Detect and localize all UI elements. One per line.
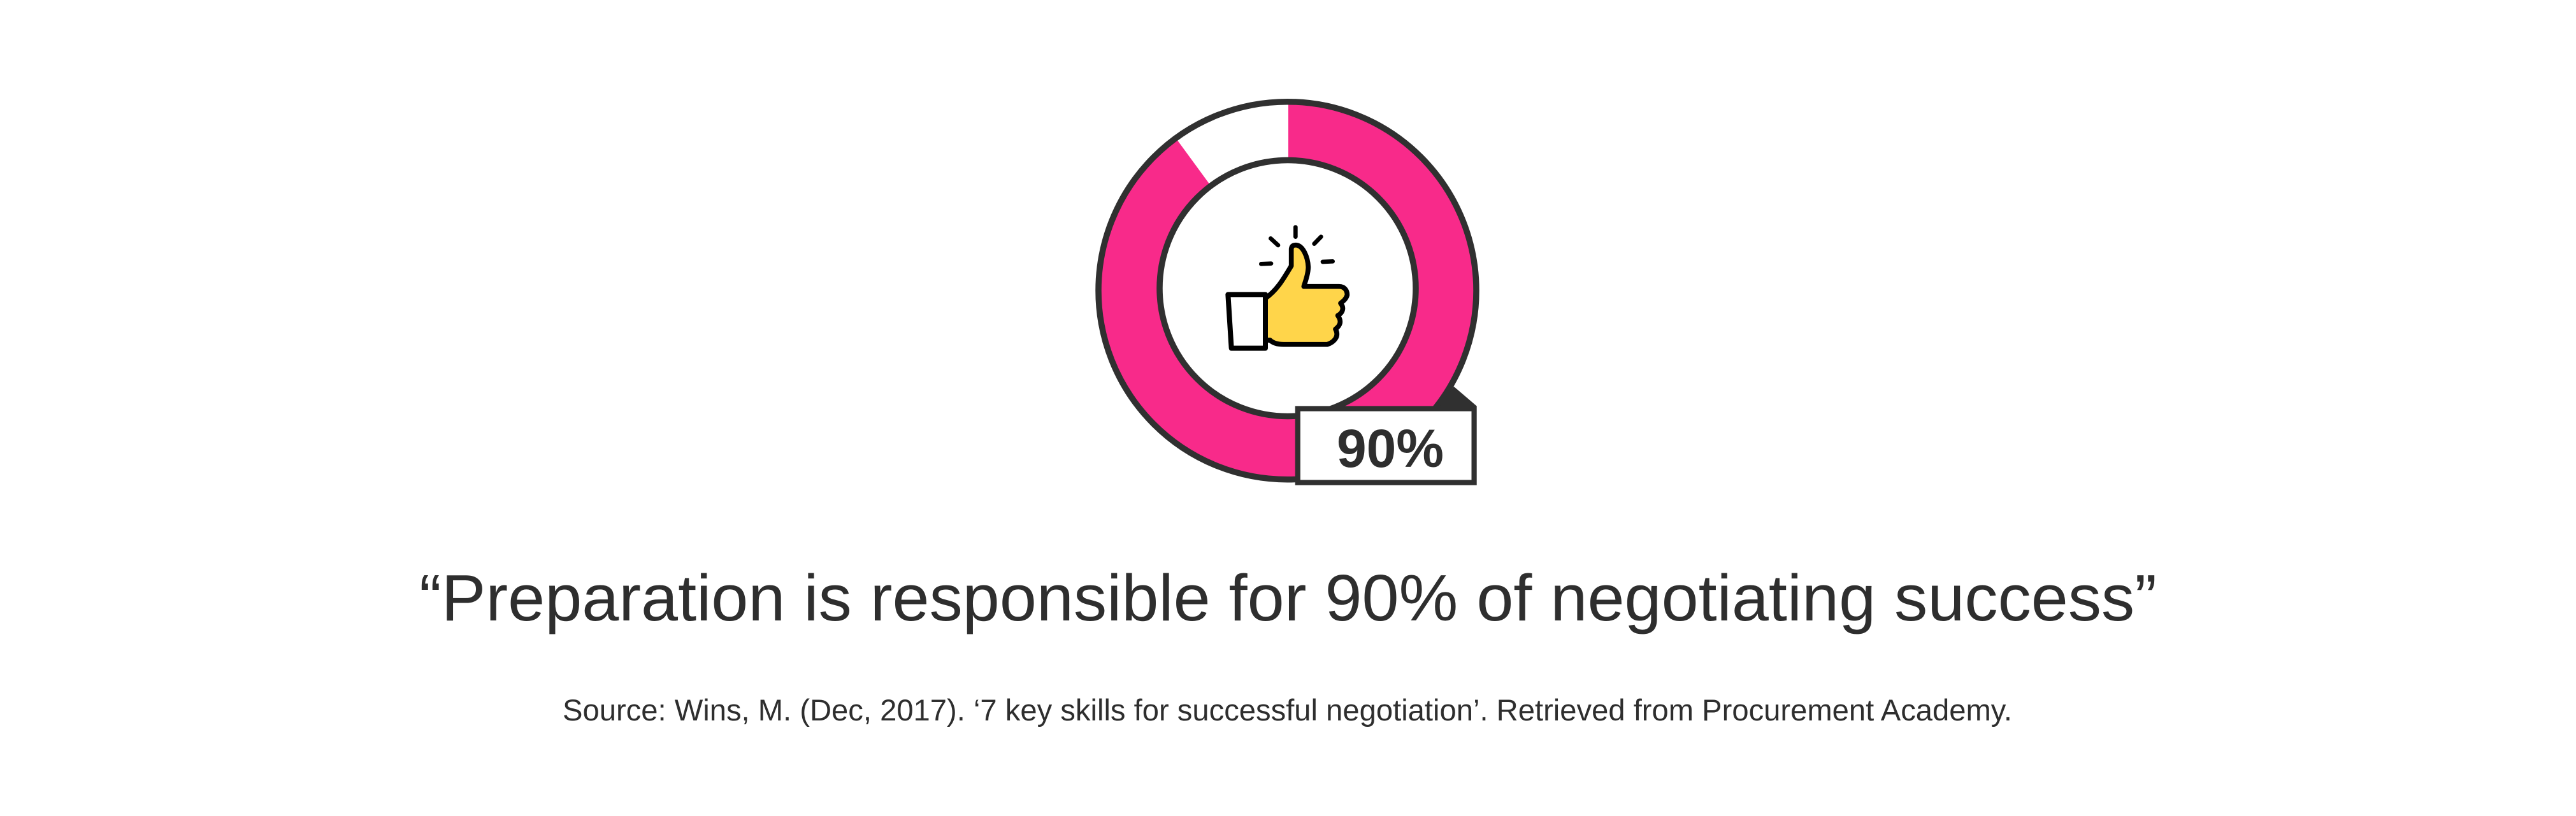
outer ring outline <box>1098 102 1476 480</box>
callout box <box>1298 409 1474 483</box>
thumb hand <box>1265 245 1347 345</box>
source line: Source: Wins, M. (Dec, 2017). ‘7 key skills for successful negotiation’. Retrieved from Procurement Academy. <box>563 693 2012 727</box>
callout: 90% <box>1298 387 1477 483</box>
chart filled disc <box>1098 102 1476 480</box>
callout value: 90% <box>1337 419 1444 478</box>
cuff <box>1228 294 1265 348</box>
donut chart: 90% <box>1098 64 1476 480</box>
icon: thumbs up <box>1228 227 1347 348</box>
title quote: “Preparation is responsible for 90% of negotiating success” <box>419 561 2157 634</box>
shine rays <box>1261 227 1333 264</box>
unfilled 10% segment <box>1140 64 1288 247</box>
callout fold triangle <box>1440 387 1477 406</box>
inner circle <box>1160 161 1416 417</box>
